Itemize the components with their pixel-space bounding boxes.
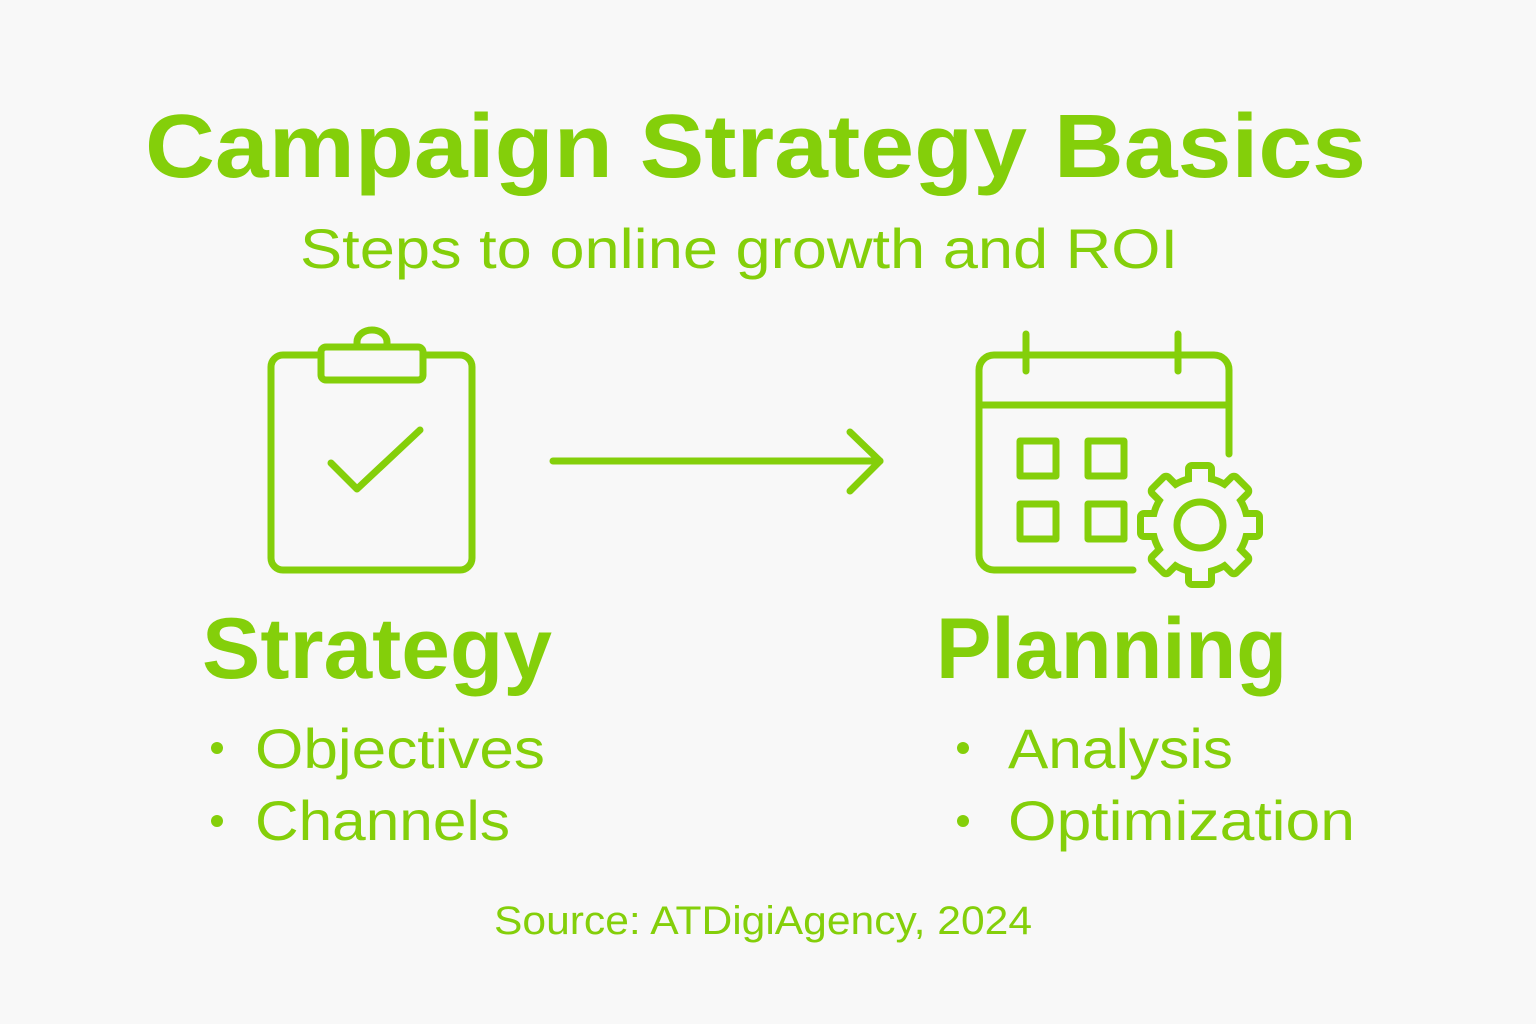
list: planning items — [957, 717, 1355, 852]
list: strategy items — [211, 717, 545, 852]
icon: calendar with gear — [979, 334, 1256, 581]
arrow — [553, 432, 880, 491]
heading: Strategy: Strategy — [202, 601, 552, 697]
list: strategy items: Objectives — [255, 717, 545, 780]
list: strategy items: Channels — [255, 789, 510, 852]
icon: clipboard — [271, 330, 472, 570]
list: planning items: Analysis — [1008, 717, 1233, 780]
list: planning items: Optimization — [1008, 789, 1355, 852]
source: Source: ATDigiAgency, 2024 — [494, 899, 1032, 943]
heading: Planning: Planning — [936, 601, 1287, 697]
subtitle: Steps to online growth and ROI — [300, 217, 1178, 280]
title: Campaign Strategy Basics — [145, 97, 1366, 197]
